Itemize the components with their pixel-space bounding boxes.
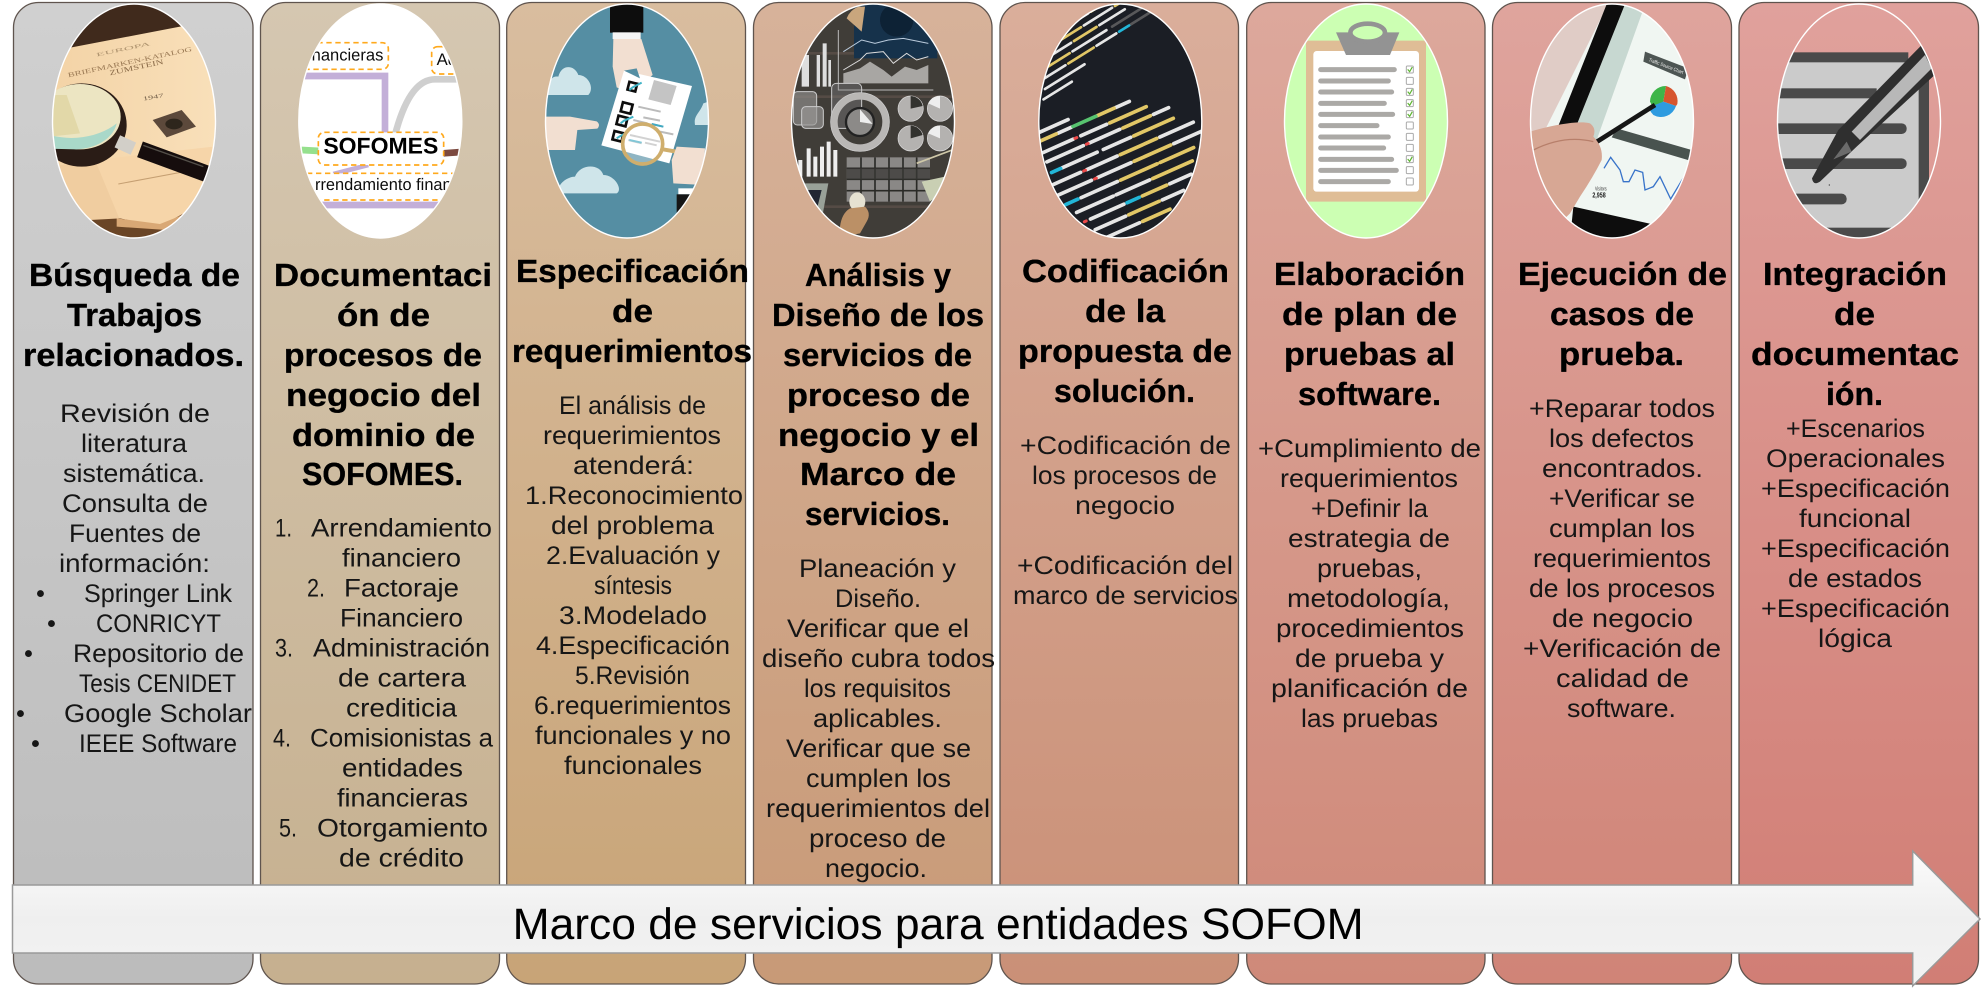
body text: +Reparar todos — [1529, 395, 1715, 423]
heading: Ejecución de — [1518, 256, 1727, 292]
heading: requerimientos — [512, 333, 752, 369]
heading — [1518, 256, 1727, 372]
icon: SOFOMES concept map: Ad — [437, 50, 457, 69]
panel: Ejecución de casos de prueba — [1492, 0, 1732, 984]
body text: • — [16, 700, 25, 728]
body text: funcionales y no — [535, 722, 731, 750]
heading — [772, 257, 984, 532]
body text: Verificar que se — [786, 735, 971, 763]
white oval outlines — [52, 4, 1940, 238]
heading: Codificación — [1022, 253, 1229, 289]
heading: de — [1834, 296, 1875, 332]
body text: requerimientos — [543, 422, 721, 450]
panel: Documentación de procesos de negocio — [260, 0, 500, 984]
body text: +Especificación — [1761, 475, 1950, 503]
body text: cumplan los — [1549, 515, 1695, 543]
body text: de negocio — [1552, 605, 1693, 633]
panel: Integración de documentación — [1739, 2, 1978, 984]
body text: sistemática. — [63, 460, 205, 488]
icon: SOFOMES concept map — [300, 4, 462, 238]
heading — [23, 257, 244, 373]
icon: SOFOMES concept map: SOFOMES — [323, 133, 438, 158]
body text: Financiero — [340, 604, 463, 632]
body text: Otorgamiento — [317, 814, 488, 842]
body text: requerimientos — [1280, 465, 1458, 493]
heading: Elaboración — [1274, 256, 1465, 292]
body text: Arrendamiento — [311, 514, 492, 542]
heading — [1018, 253, 1232, 409]
heading: casos de — [1550, 296, 1694, 332]
heading: Trabajos — [67, 297, 202, 333]
heading: servicios. — [805, 496, 950, 532]
body text: calidad de — [1556, 665, 1689, 693]
icon: pen pointing at tablet charts: 2,958 — [1592, 191, 1606, 199]
body text: procedimientos — [1276, 615, 1464, 643]
body text: 1.Reconocimiento — [525, 482, 743, 510]
body text: Comisionistas a — [310, 724, 494, 752]
body text: Operacionales — [1766, 445, 1945, 473]
body text: +Definir la — [1311, 495, 1429, 523]
body text: software. — [1567, 695, 1676, 723]
heading: negocio del — [286, 377, 481, 413]
body text: crediticia — [346, 694, 458, 722]
heading: ón de — [337, 297, 430, 333]
heading: pruebas al — [1284, 336, 1455, 372]
heading: Análisis y — [805, 257, 951, 293]
body text: requerimientos — [1533, 545, 1711, 573]
body text: marco de servicios — [1013, 582, 1238, 610]
body text: información: — [59, 550, 210, 578]
heading: relacionados. — [23, 337, 244, 373]
panel: Especificación de requerimientos — [507, 0, 752, 984]
body text: Administración — [313, 634, 490, 662]
heading: solución. — [1054, 373, 1195, 409]
icon: SOFOMES concept map: nancieras — [312, 46, 383, 64]
heading: documentac — [1751, 336, 1959, 372]
body text — [273, 514, 494, 872]
heading: Integración — [1763, 256, 1947, 292]
body text: Springer Link — [84, 580, 232, 608]
body text: IEEE Software — [79, 730, 237, 758]
arrow: Marco de servicios para entidades SOFOM — [12, 851, 1980, 986]
heading: servicios de — [783, 337, 972, 373]
body text: de crédito — [339, 844, 464, 872]
heading — [512, 253, 752, 369]
body text — [1258, 435, 1481, 733]
body text: • — [36, 580, 45, 608]
body text: 6.requerimientos — [534, 692, 731, 720]
heading — [274, 257, 492, 492]
body text: Fuentes de — [69, 520, 201, 548]
body text: 5. — [279, 814, 297, 842]
body text: cumplen los — [806, 765, 951, 793]
heading: prueba. — [1559, 336, 1684, 372]
body text: aplicables. — [813, 705, 942, 733]
icon: pen pointing at tablet charts: Visitors — [1595, 186, 1607, 192]
icon: hands reviewing checklist — [540, 0, 713, 240]
body text: Repositorio de — [73, 640, 244, 668]
panel: Elaboración de plan de pruebas — [1247, 0, 1485, 984]
icon: magnifying glass on catalogue book: EUROPA — [96, 41, 151, 58]
body text: negocio. — [825, 855, 927, 883]
body text: +Escenarios — [1786, 415, 1925, 443]
body text: Diseño. — [835, 585, 921, 613]
body text: 3.Modelado — [559, 602, 707, 630]
body text: +Especificación — [1761, 535, 1950, 563]
body text: financieras — [337, 784, 468, 812]
icon: analytics dashboard on desk — [792, 4, 954, 238]
body text: +Cumplimiento de — [1258, 435, 1481, 463]
body text — [1523, 395, 1721, 723]
body text: +Codificación del — [1017, 552, 1233, 580]
icon: SOFOMES concept map: rrendamiento finan — [315, 175, 452, 194]
heading: software. — [1298, 376, 1441, 412]
body text: síntesis — [594, 572, 672, 600]
icon: source code on dark screen — [1040, 4, 1202, 238]
heading: proceso de — [787, 377, 970, 413]
body text: Google Scholar — [64, 700, 253, 728]
body text: del problema — [551, 512, 715, 540]
body text: funcional — [1799, 505, 1911, 533]
body text: Tesis CENIDET — [79, 670, 236, 698]
body text: 3. — [275, 634, 293, 662]
heading: Búsqueda de — [29, 257, 240, 293]
heading: de la — [1085, 293, 1165, 329]
body text — [1013, 432, 1238, 610]
body text: de prueba y — [1295, 645, 1444, 673]
arrow label: Marco de servicios para entidades SOFOM — [513, 900, 1364, 949]
body text: 1. — [275, 514, 292, 542]
body text: CONRICYT — [96, 610, 221, 638]
heading: procesos de — [284, 337, 482, 373]
body text: funcionales — [564, 752, 702, 780]
body text: financiero — [342, 544, 461, 572]
body text: los defectos — [1549, 425, 1694, 453]
body text: planificación de — [1271, 675, 1468, 703]
body text: encontrados. — [1542, 455, 1703, 483]
body text: • — [47, 610, 56, 638]
body text: atenderá: — [573, 452, 694, 480]
heading: SOFOMES. — [302, 456, 463, 492]
body text: entidades — [342, 754, 463, 782]
body text: Factoraje — [344, 574, 459, 602]
body text: 4.Especificación — [536, 632, 730, 660]
body text: El análisis de — [559, 392, 706, 420]
heading: Marco de — [800, 456, 956, 492]
icon: magnifying glass on catalogue book: 1947 — [142, 92, 164, 102]
body text: proceso de — [809, 825, 946, 853]
body text: 4. — [273, 724, 291, 752]
body text: Revisión de — [60, 400, 210, 428]
heading: Diseño de los — [772, 297, 984, 333]
heading: ión. — [1826, 376, 1883, 412]
body text: requerimientos del — [766, 795, 990, 823]
body text: 2.Evaluación y — [546, 542, 720, 570]
body text: las pruebas — [1301, 705, 1438, 733]
body text: literatura — [81, 430, 188, 458]
heading: Documentaci — [274, 257, 492, 293]
body text: de los procesos — [1529, 575, 1715, 603]
body text: lógica — [1818, 625, 1893, 653]
body text — [525, 392, 743, 780]
body text: +Codificación de — [1020, 432, 1231, 460]
body text: Verificar que el — [787, 615, 969, 643]
body text: Consulta de — [62, 490, 208, 518]
heading: negocio y el — [778, 417, 979, 453]
panel: Búsqueda de trabajos relacionados — [14, 0, 253, 984]
heading: propuesta de — [1018, 333, 1232, 369]
heading: Especificación — [516, 253, 749, 289]
body text: de cartera — [338, 664, 467, 692]
body text: los procesos de — [1032, 462, 1217, 490]
body text: negocio — [1075, 492, 1175, 520]
body text: metodología, — [1287, 585, 1450, 613]
icon: magnifying glass on catalogue book: BRIEFMARKEN-KATALOG — [67, 45, 193, 79]
body text: 2. — [307, 574, 325, 602]
heading: dominio de — [292, 417, 475, 453]
body text — [762, 555, 995, 883]
heading: de — [612, 293, 653, 329]
body text: estrategia de — [1288, 525, 1450, 553]
icon: magnifying glass on catalogue book: ZUMSTEIN — [109, 57, 164, 77]
icon: pen writing on document — [1773, 43, 1938, 240]
body text: pruebas, — [1317, 555, 1422, 583]
panel: Análisis y Diseño de los servicios — [754, 0, 995, 984]
icon: pen pointing at tablet charts — [1527, 0, 1700, 240]
heading: de plan de — [1282, 296, 1457, 332]
body text: • — [24, 640, 33, 668]
icon: pen pointing at tablet charts: Traffic Source Chart — [1648, 57, 1684, 75]
body text: Planeación y — [799, 555, 956, 583]
body text: +Especificación — [1761, 595, 1950, 623]
heading — [1274, 256, 1465, 412]
heading — [1751, 256, 1959, 412]
body text — [16, 400, 253, 758]
body text: +Verificar se — [1549, 485, 1695, 513]
panel: Codificación de la propuesta de solución — [1000, 0, 1238, 984]
body text: • — [31, 730, 40, 758]
body text: de estados — [1788, 565, 1922, 593]
body text: los requisitos — [804, 675, 951, 703]
icon: magnifying glass on catalogue book — [53, 4, 215, 238]
icon: clipboard checklist — [1280, 0, 1453, 240]
body text: +Verificación de — [1523, 635, 1721, 663]
body text: 5.Revisión — [575, 662, 690, 690]
body text: diseño cubra todos — [762, 645, 995, 673]
body text — [1761, 415, 1950, 653]
